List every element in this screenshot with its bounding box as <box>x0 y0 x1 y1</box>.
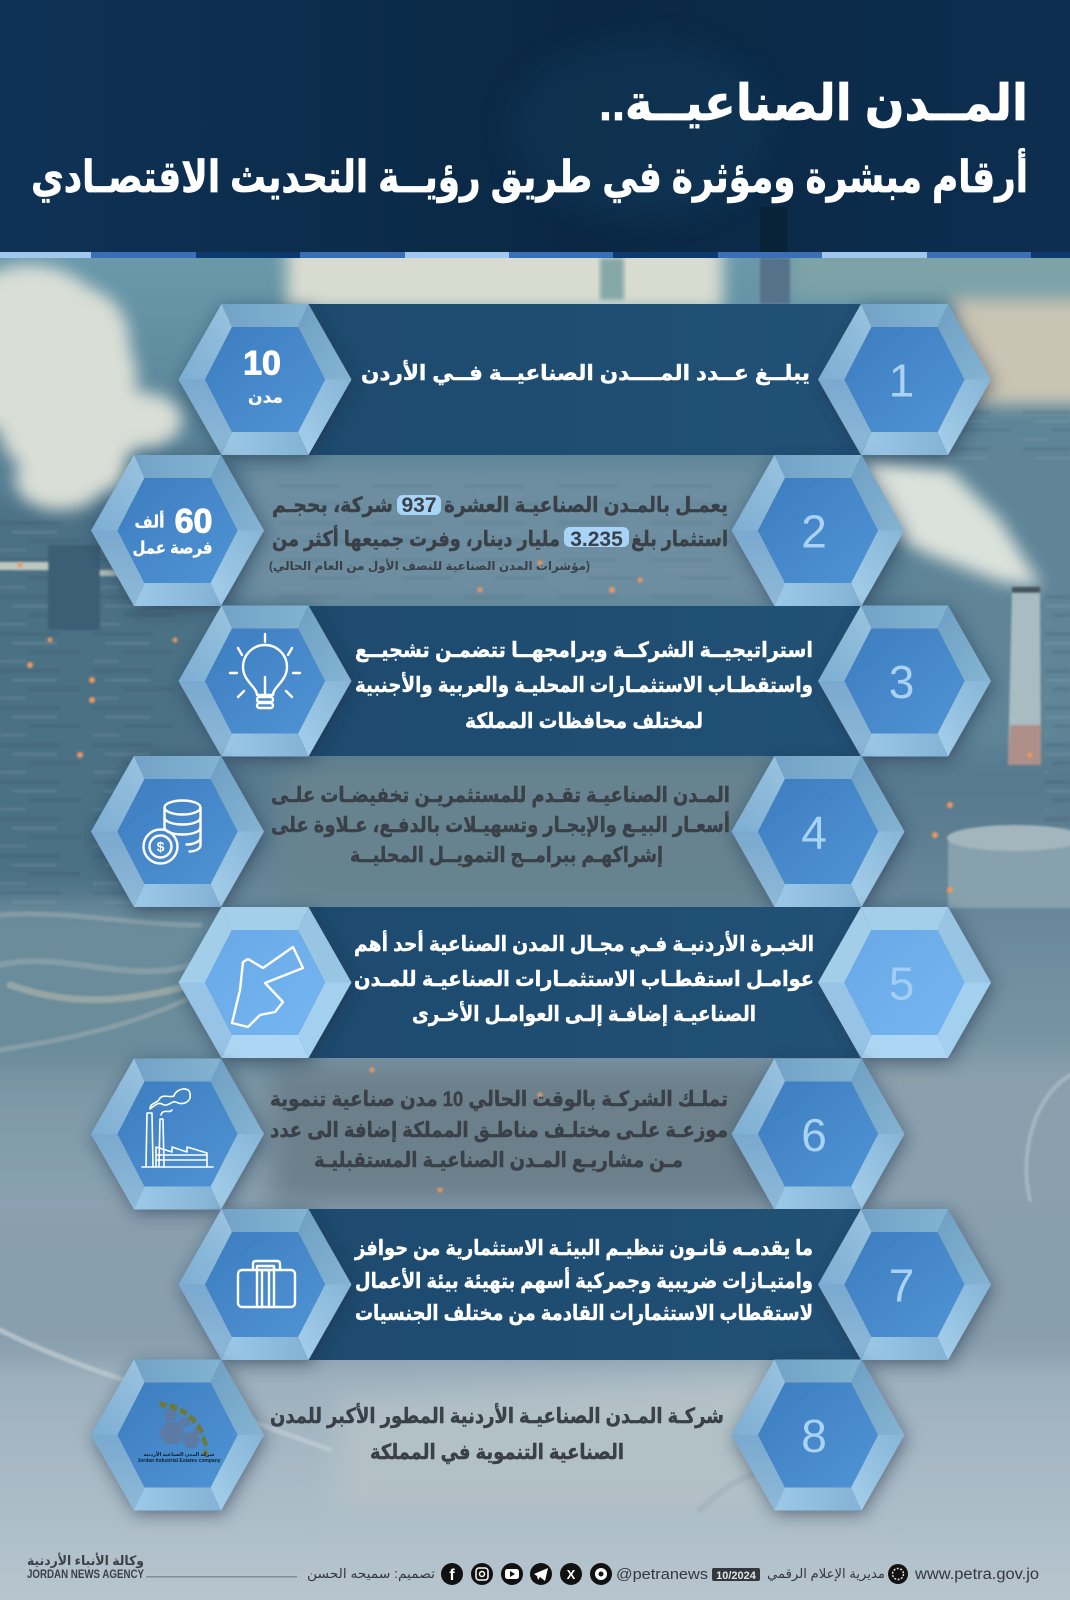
text 2: 937 <box>401 494 437 517</box>
row 2 <box>91 455 904 606</box>
text 8 <box>270 1402 724 1464</box>
agency logo text <box>27 1552 297 1581</box>
text 2: استثمار بلغ <box>631 528 728 551</box>
stripe under header <box>0 252 1070 258</box>
icon: globe <box>888 1564 908 1584</box>
social icons: f <box>449 1567 455 1584</box>
hexagon: number 6 <box>732 1058 904 1210</box>
text 3: استراتيجيــة الشركــة وبرامجهــا تتضمـن تشجيــع <box>355 639 813 662</box>
text 1: يبلــغ عــدد المــــدن الصناعيــة فــي الأردن <box>361 359 810 385</box>
text 5 <box>354 929 814 1026</box>
text 7: ما يقدمـه قانـون تنظيـم البيئـة الاستثمارية من حوافز <box>354 1237 813 1260</box>
smoke cloud right <box>860 460 1042 587</box>
row 4 <box>91 756 904 907</box>
hexagon: briefcase icon <box>178 1209 352 1360</box>
hexagon: number 5 <box>818 907 991 1058</box>
agency logo text: JORDAN NEWS AGENCY <box>27 1567 144 1581</box>
hexagon: number 8: 8 <box>801 1410 827 1462</box>
text 3: لمختلف محافظات المملكة <box>465 710 703 733</box>
hexagon: number 6: 6 <box>801 1109 827 1161</box>
hexagon: number 4: 4 <box>801 806 827 858</box>
heading line 1: المــدن الصناعيــة.. <box>599 75 1028 131</box>
hexagon: number 4 <box>732 756 904 907</box>
logo dome: شركة المدن الصناعية الأردنية <box>144 1451 215 1458</box>
towers and pipes <box>0 258 1070 1510</box>
text 8: شركـة المـدن الصناعيـة الأردنية المطور الأكبر للمدن <box>270 1402 724 1428</box>
hexagon: 60 thousand jobs <box>91 455 264 606</box>
smoke cloud left <box>0 265 182 510</box>
text 6 <box>270 1088 728 1172</box>
handle: @petranews <box>616 1566 708 1583</box>
text 4: إشراكهـم ببرامــج التمويــل المحليــة <box>350 844 663 867</box>
text 7 <box>354 1237 813 1325</box>
text 2: (مؤشرات المدن الصناعية للنصف الأول من العام الحالي) <box>269 558 590 574</box>
row 6 <box>91 1058 904 1210</box>
hexagon: number 1: 1 <box>889 354 914 406</box>
banner 3 <box>300 606 870 756</box>
hexagon: 60 thousand jobs: ألف <box>134 510 164 532</box>
banner 5 <box>300 907 870 1058</box>
text 6: موزعـة علـى مختلـف مناطـق المملكة إضافة الى عدد <box>270 1119 728 1142</box>
text 5: الصناعيـة إضافـة إلـى العوامـل الأخـرى <box>412 1000 756 1026</box>
hexagon: factory icon <box>91 1058 264 1210</box>
upper haze and clouds <box>287 235 1070 405</box>
text 6: تملـك الشركـة بالوقت الحالي 10 مدن صناعية تنموية <box>270 1088 728 1111</box>
row 5 <box>178 907 991 1058</box>
hexagon: coins icon: $ <box>157 838 165 854</box>
text 2: 3.235 <box>570 528 623 551</box>
logo dome: Jordan Industrial Estates company <box>137 1458 221 1464</box>
hexagon: light bulb icon <box>178 606 352 756</box>
hexagon: value 10 cities: مدن <box>248 390 283 406</box>
logo dome <box>137 1401 221 1464</box>
text 6: مـن مشاريـع المـدن الصناعيـة المستقبليـة <box>314 1149 683 1172</box>
agency logo text: وكالة الأنباء الأردنية <box>27 1552 144 1568</box>
text 7: لاستقطاب الاستثمارات القادمة من مختلف الجنسيات <box>355 1302 813 1325</box>
date tag: 10/2024 <box>716 1570 757 1582</box>
website: www.petra.gov.jo <box>914 1566 1039 1583</box>
hexagon: company logo <box>91 1360 264 1510</box>
text 3: واستقطـاب الاستثمـارات المحليـة والعربية والأجنبية <box>355 671 813 697</box>
hexagon: number 7 <box>818 1209 991 1360</box>
hexagon: number 7: 7 <box>889 1260 914 1312</box>
banner 1 <box>300 304 870 455</box>
hexagon: number 5: 5 <box>889 958 914 1010</box>
hexagon: 60 thousand jobs: 60 <box>175 502 212 540</box>
hexagon: coins icon <box>91 756 264 907</box>
row 3 <box>178 606 991 756</box>
hexagon: 60 thousand jobs: فرصة عمل <box>132 538 212 558</box>
hexagon: value 10 cities: 10 <box>243 344 281 382</box>
text 2: مليار دينار، وفرت جميعها أكثر من <box>272 524 560 551</box>
building texture <box>0 405 1070 910</box>
text 7: وامتيـازات ضريبية وجمركية أسهم بتهيئة بيئة الأعمال <box>355 1266 813 1293</box>
row 8 <box>91 1360 904 1510</box>
hexagon: value 10 cities <box>178 304 352 455</box>
hexagon: number 2: 2 <box>801 506 827 558</box>
text 4 <box>271 784 730 867</box>
hexagon: number 1 <box>818 304 991 455</box>
text 4: أسعـار البيـع والإيجـار وتسهيـلات بالدفـع، عـلاوة على <box>271 810 730 837</box>
designer credit: تصميم: سميحه الحسن <box>307 1566 435 1582</box>
footer <box>27 1552 1039 1585</box>
social icons <box>441 1563 612 1585</box>
hexagon: number 3: 3 <box>889 656 914 708</box>
header band <box>0 0 1070 252</box>
text 8: الصناعية التنموية في المملكة <box>370 1441 624 1464</box>
row 7 <box>178 1209 991 1360</box>
text 2: يعمـل بالمـدن الصناعيـة العشرة <box>444 494 728 517</box>
banner 7 <box>300 1209 870 1360</box>
hexagon: number 3 <box>818 606 991 756</box>
text 3 <box>355 639 813 733</box>
social icons: X <box>567 1567 576 1582</box>
text 4: المـدن الصناعيـة تقـدم للمستثمريـن تخفيضـات علـى <box>271 784 730 807</box>
row 1 <box>178 304 991 455</box>
text 5: الخبـرة الأردنيـة فـي مجـال المدن الصناعية أحد أهم <box>354 929 814 956</box>
hexagon: number 8 <box>732 1360 904 1510</box>
text 2 <box>269 494 728 574</box>
hexagon: Jordan map icon <box>178 907 352 1058</box>
directorate: مديرية الإعلام الرقمي <box>767 1566 885 1582</box>
text 5: عوامـل استقطـاب الاستثمـارات الصناعيـة للمـدن <box>354 968 814 991</box>
hexagon: number 2 <box>732 455 904 606</box>
text 2: شركة، بحجـم <box>272 494 393 517</box>
